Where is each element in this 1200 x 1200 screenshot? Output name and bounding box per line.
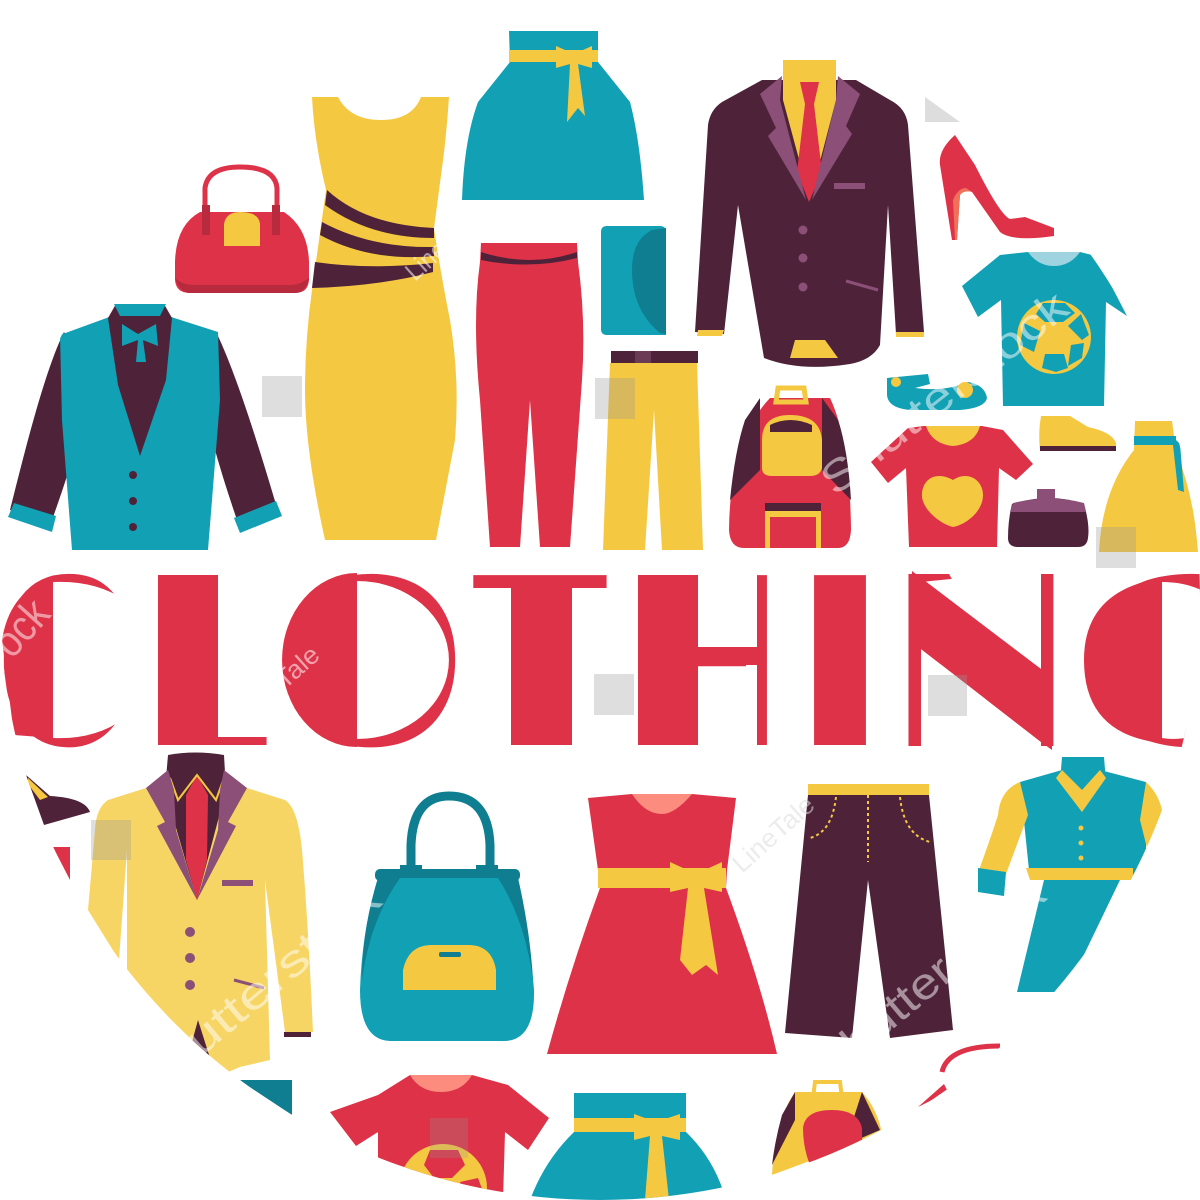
- teal clutch: [601, 226, 666, 335]
- teal handbag: [360, 796, 534, 1041]
- yellow trousers: [603, 351, 703, 550]
- teal skirt: [462, 31, 644, 200]
- teal skirt bottom: [530, 1093, 726, 1200]
- teal and yellow suit: [978, 757, 1163, 992]
- purple purse: [1008, 489, 1088, 547]
- yellow skirt right: [1099, 421, 1198, 552]
- title: T: [468, 522, 612, 798]
- red heel fragment: [918, 1046, 1000, 1107]
- plum suit: [695, 60, 924, 367]
- title: L: [150, 522, 274, 798]
- watermarks: Shutterstock: [811, 281, 1079, 505]
- teal clutch fragment: [239, 1080, 292, 1115]
- title: N: [892, 520, 1070, 799]
- plum jeans: [785, 784, 953, 1038]
- red t-shirt with heart: [871, 426, 1033, 547]
- red fragment: [53, 847, 70, 880]
- vest with shirt: [8, 304, 282, 550]
- watermarks: LineTale: [726, 789, 820, 878]
- yellow jacket: [88, 752, 313, 1078]
- yellow boot: [1039, 416, 1116, 451]
- title: O: [275, 523, 467, 797]
- red soccer t-shirt: [330, 1075, 549, 1200]
- watermarks: LineTale: [399, 205, 484, 286]
- watermarks: Shutterstock: [805, 868, 1056, 1090]
- watermarks: LineTale: [231, 639, 325, 728]
- boot top left: [26, 775, 90, 825]
- teal flat shoe: [887, 374, 987, 410]
- backpack fragment: [772, 1082, 882, 1175]
- teal t-shirt: [962, 252, 1127, 406]
- title: [2, 571, 1200, 750]
- backpack: [729, 388, 851, 548]
- red party dress: [547, 794, 777, 1054]
- high heel: [940, 135, 1054, 240]
- title: I: [790, 522, 890, 798]
- handbag red: [175, 167, 309, 293]
- yellow dress: [305, 97, 457, 540]
- watermarks: utterst.ck: [175, 873, 391, 1066]
- title: H: [625, 522, 785, 798]
- red pants: [476, 243, 583, 547]
